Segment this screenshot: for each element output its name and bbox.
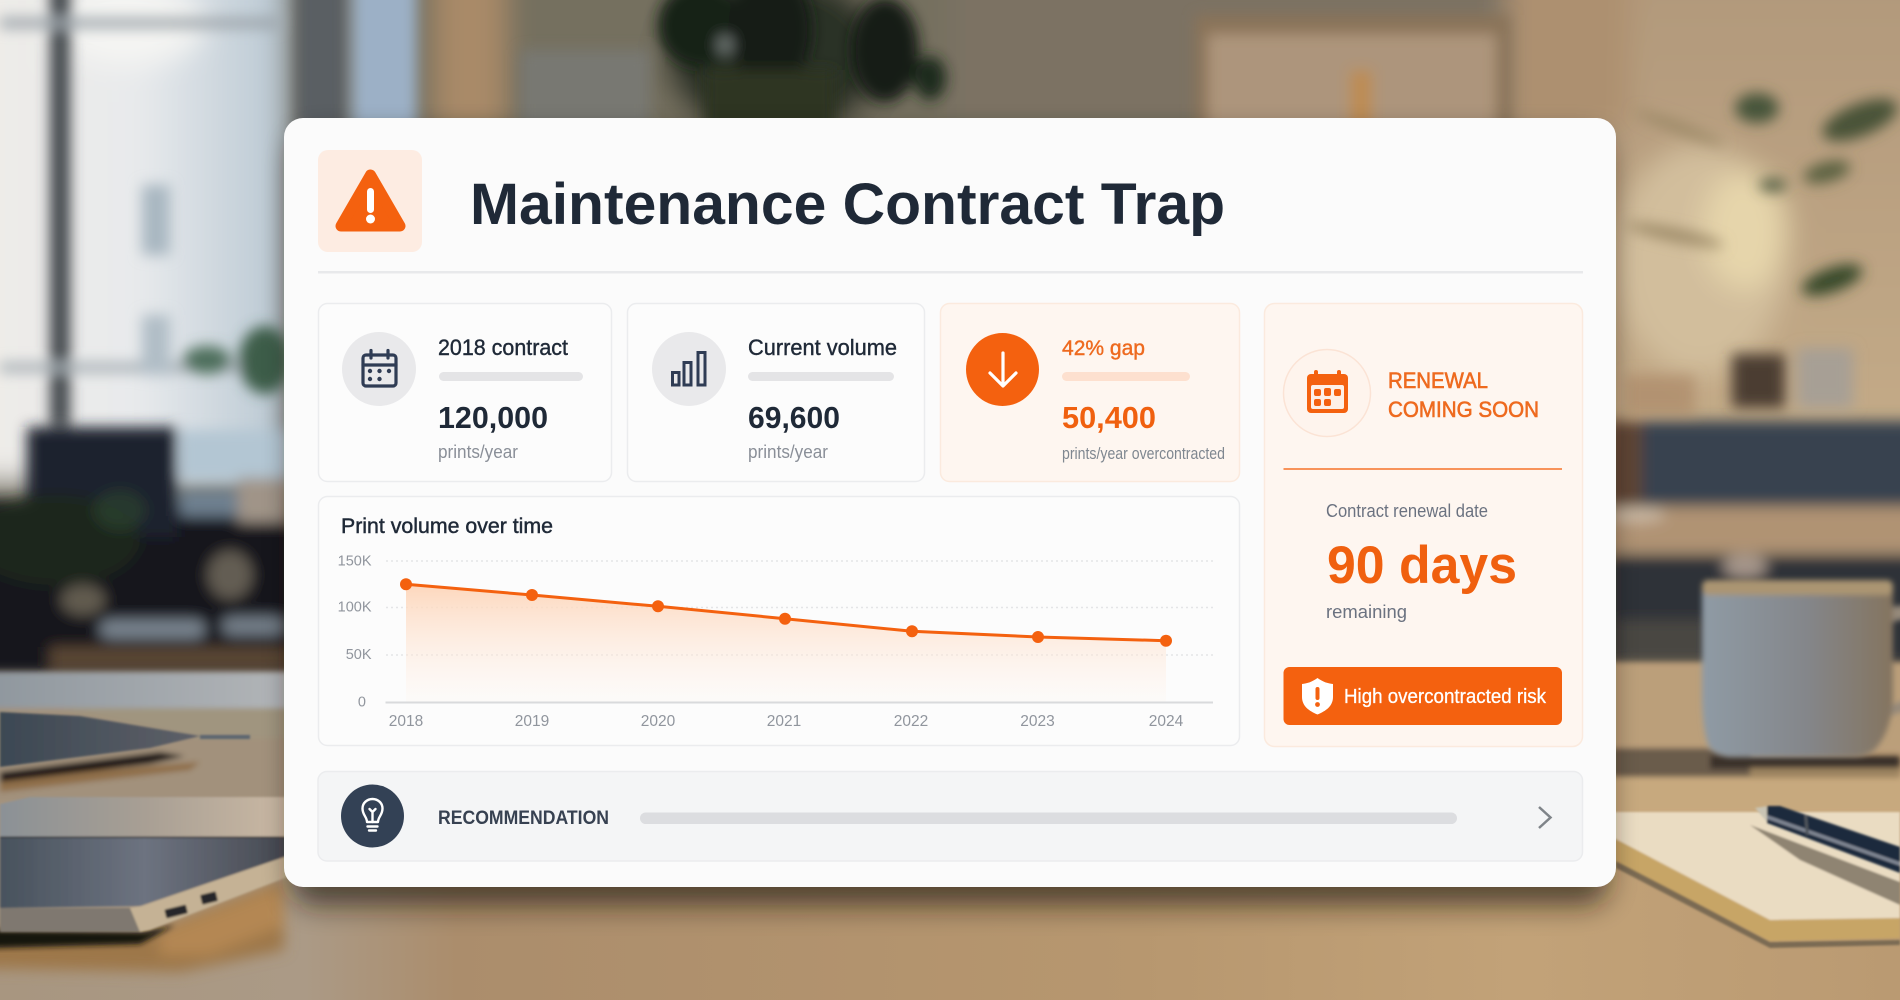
panel: current volume [628,304,924,482]
line chart: 100K [338,600,372,616]
panel: 42% gap: 50,400 [1062,400,1156,435]
panel: current volume: Current volume [748,335,897,360]
title: Maintenance Contract Trap [470,172,1225,237]
risk button [1284,667,1562,725]
line chart: 2021 [767,713,801,730]
panel: recommendation: RECOMMENDATION [438,808,609,829]
panel: renewal: remaining [1326,602,1407,622]
icon: calendar [363,350,396,386]
icon: light bulb [362,799,382,830]
panel: current volume: 69,600 [748,400,840,435]
line chart: 150K [338,554,372,570]
panel: 42% gap [940,304,1240,482]
panel: 2018 contract: prints/year [438,442,518,462]
icon: chevron [1539,807,1550,828]
panel: 42% gap: prints/year overcontracted [1062,444,1225,463]
pen [1755,806,1900,873]
panel: 2018 contract: 2018 contract [438,335,568,360]
chart panel: print volume over time [318,496,1240,746]
line chart: 2019 [515,713,549,730]
panel: 2018 contract: 120,000 [438,400,548,435]
panel: recommendation [318,772,1582,861]
header icon: warning triangle [318,150,422,252]
line chart: 2018 [389,713,423,730]
card shadow [292,135,1608,905]
line chart: 50K [346,647,372,663]
risk button: High overcontracted risk [1344,686,1547,708]
main card [284,118,1616,887]
line chart: 2023 [1020,713,1055,730]
icon: bar chart [672,352,705,385]
line chart: 0 [358,694,366,710]
panel: current volume: prints/year [748,442,828,462]
chart panel: print volume over time: Print volume over time [341,515,553,538]
panel: renewal: 90 days [1327,536,1517,595]
panel: renewal: COMING SOON [1388,397,1539,422]
panel: renewal: RENEWAL [1388,368,1488,393]
icon: down arrow [990,353,1016,386]
panel: 42% gap: 42% gap [1062,337,1145,360]
icon: shield [1302,678,1333,714]
panel: renewal: Contract renewal date [1326,501,1488,521]
panel: 2018 contract [318,304,612,482]
line chart: 2022 [894,713,928,730]
icon: orange calendar [1307,370,1348,413]
panel: renewal [1264,304,1582,746]
line chart: 2020 [641,713,676,730]
line chart [338,554,1213,730]
line chart: 2024 [1149,713,1184,730]
